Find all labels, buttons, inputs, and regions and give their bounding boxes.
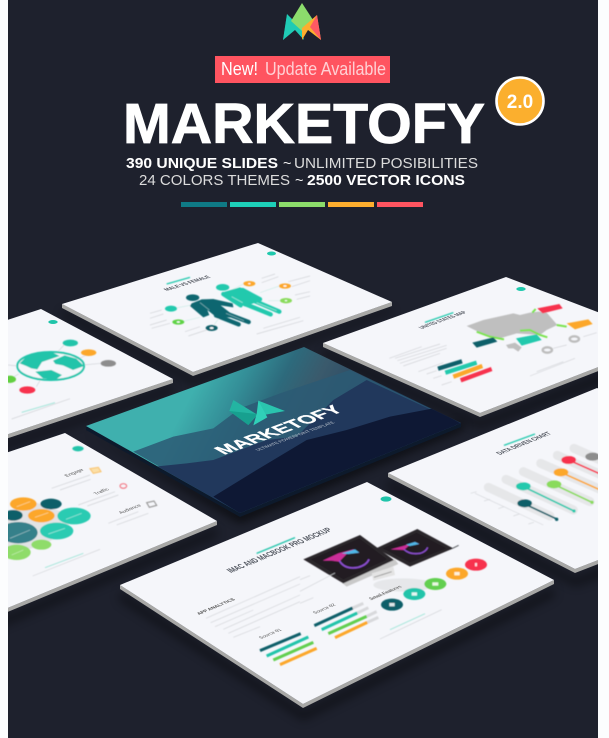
grey tracks (488, 448, 602, 516)
slide heading: DATA DRIVEN CHART (494, 431, 554, 456)
bars source 01 (260, 634, 317, 665)
update badge: New! (221, 59, 258, 79)
subtitle lines: ~ (283, 156, 291, 172)
slide labels: Source 02 (312, 603, 338, 615)
cover subtitle: ULTIMATE POWERPOINT TEMPLATE (255, 421, 337, 452)
map (467, 309, 567, 352)
subtitle lines (126, 156, 478, 189)
version badge (496, 78, 544, 124)
slide labels: Source 01 (258, 628, 284, 640)
slide: bubbles (0, 433, 217, 652)
subtitle lines: UNLIMITED POSIBILITIES (294, 156, 478, 172)
legend labels: Audience (117, 504, 143, 515)
colour bars (181, 202, 423, 207)
subtitle lines: 24 COLORS THEMES (139, 173, 290, 189)
macbook (376, 529, 459, 567)
slide: marketofy cover (86, 347, 465, 522)
slide: imac and macbook mockup (120, 482, 554, 720)
update badge: Update Available (265, 59, 386, 79)
legend icons (90, 467, 157, 507)
dark figure (186, 294, 249, 324)
subtitle lines: 2500 VECTOR ICONS (307, 173, 465, 189)
bars source 02 (314, 603, 378, 638)
callout dots (4, 340, 116, 394)
imac (303, 535, 398, 587)
right page margin (598, 0, 609, 738)
slide heading: MALE VS FEMALE (163, 275, 213, 292)
update badge (215, 56, 390, 83)
globe (17, 352, 84, 380)
feature icons (381, 559, 487, 611)
legend labels: Engage (63, 468, 86, 478)
subtitle lines: ~ (295, 173, 303, 189)
map tags (472, 304, 593, 348)
header logo (283, 3, 321, 40)
coloured sliders (523, 460, 602, 519)
bubble cluster (0, 497, 91, 560)
slide labels: APP ANALYTICS (196, 597, 238, 616)
stat rings (543, 336, 579, 353)
slide: male vs female (62, 243, 392, 384)
callout dots (165, 281, 292, 331)
slide: globe (0, 309, 173, 470)
slide heading: IMAC AND MACBOOK PRO MOCKUP (224, 526, 334, 574)
slide: united states map (323, 277, 609, 428)
slide labels (196, 585, 404, 640)
version badge: 2.0 (507, 92, 533, 113)
legend labels: Traffic (92, 487, 111, 496)
left page margin (0, 0, 8, 738)
subtitle lines: 390 UNIQUE SLIDES (126, 156, 278, 172)
slide labels: Small Features (368, 585, 404, 601)
slide heading: UNITED STATES MAP (417, 310, 469, 330)
cover title: MARKETOFY (210, 403, 349, 457)
title: MARKETOFY (123, 92, 485, 155)
mountain layers (133, 370, 461, 513)
light figure (216, 284, 279, 314)
cover logo (229, 400, 285, 425)
slide: data driven chart (388, 388, 609, 586)
bar chart (438, 361, 492, 380)
legend labels (63, 468, 143, 515)
